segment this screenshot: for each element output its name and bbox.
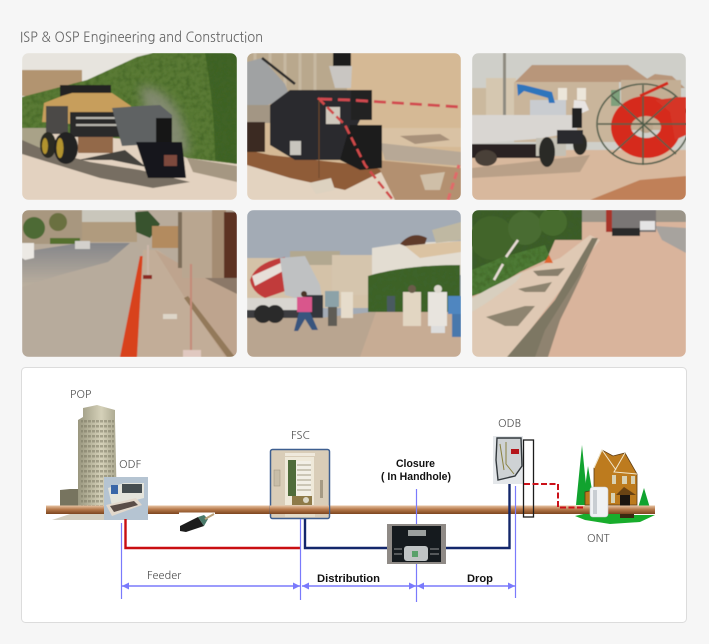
icon: closure box [387, 524, 446, 564]
line: navy distribution cable [305, 519, 388, 548]
panel: fiber network diagram [22, 368, 686, 622]
icon: ODB box [493, 436, 523, 484]
pipe: segment across house [585, 506, 655, 514]
pipe: conduit [46, 506, 655, 514]
arrow: drop span [417, 582, 515, 590]
label: Distribution: Distribution [317, 573, 380, 585]
dimension lines: segment boundaries [122, 486, 516, 602]
label: closure in handhole [381, 458, 451, 483]
label: ODF: ODF [119, 459, 142, 470]
label: ONT: ONT [587, 533, 610, 544]
title: ISP & OSP Engineering and Construction [20, 30, 263, 45]
icon: ODF panel [104, 477, 148, 520]
icon: house with trees [575, 445, 655, 524]
line: navy drop cable [446, 483, 510, 548]
line: red feeder cable [126, 519, 300, 548]
icon: black conduit riser [524, 440, 534, 517]
label: ODB: ODB [498, 418, 521, 429]
photo: road with red duct in trench [22, 210, 237, 357]
label: POP: POP [70, 389, 91, 400]
photo: concrete mixer truck and workers [247, 210, 461, 357]
arrow: feeder span [122, 582, 300, 590]
icon: ONT unit [590, 487, 608, 517]
photo: trencher machine with warning tape [247, 53, 461, 200]
photo: skid-steer loader cutting road beside hedge [22, 53, 237, 200]
pipe: segment over FSC cabinet [270, 506, 329, 514]
label: closure in handhole: Closure [396, 458, 435, 470]
label: closure in handhole: ( In Handhole) [381, 471, 451, 483]
label: Drop: Drop [467, 573, 493, 585]
photo: fresh concrete strip along road [470, 208, 686, 357]
label: Feeder: Feeder [147, 570, 181, 581]
icon: fiber cable [179, 512, 215, 532]
line: red dashed drop [524, 484, 590, 508]
label: FSC: FSC [291, 430, 310, 441]
arrow: distribution span [302, 582, 416, 590]
icon: POP building [52, 405, 117, 520]
icon: FSC cabinet [270, 450, 330, 518]
photo: truck and red duct reel [472, 53, 689, 200]
